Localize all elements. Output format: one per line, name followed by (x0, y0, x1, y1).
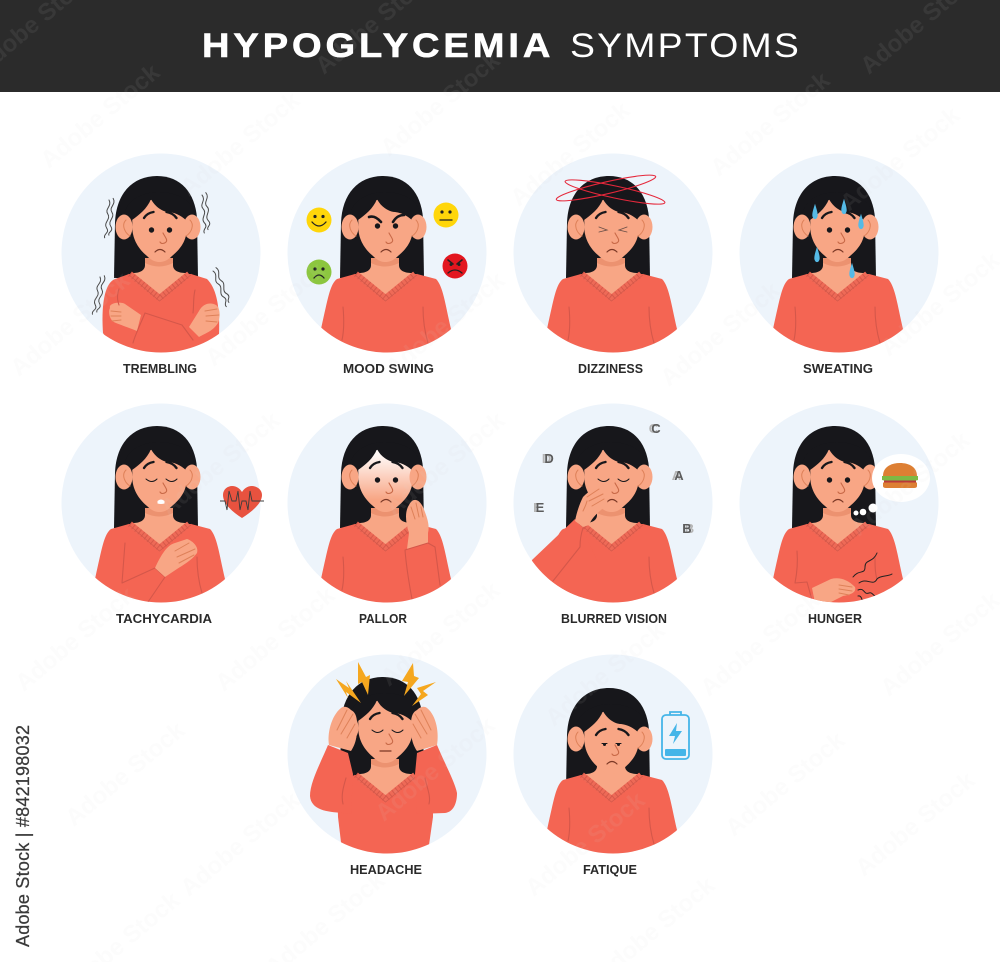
title: HYPOGLYCEMIA (202, 26, 550, 65)
figure: woman holding head (310, 677, 457, 859)
icon: blurred letters: B (685, 521, 694, 536)
label: fatique: FATIQUE (583, 862, 637, 877)
circle background (288, 154, 486, 352)
watermark: Adobe Stock (370, 711, 501, 827)
panel: tachycardia (62, 404, 264, 613)
icon: low battery (662, 712, 689, 759)
panel: mood swing (288, 154, 486, 363)
icon: blurred letters (533, 421, 694, 536)
watermark: Adobe Stock (705, 66, 836, 182)
watermark: Adobe Stock (375, 46, 506, 162)
icon: blurred letters: A (672, 468, 682, 483)
circle background (288, 654, 486, 854)
circle background (514, 404, 712, 602)
watermark: Adobe Stock (835, 101, 966, 217)
icon: angry face (442, 254, 468, 278)
icon: happy face (306, 208, 332, 232)
watermark: Adobe Stock (155, 406, 286, 522)
circle background (288, 404, 486, 602)
watermark: Adobe Stock (540, 616, 671, 732)
icon: blurred letters: C (649, 421, 659, 436)
label: hunger: HUNGER (808, 611, 863, 626)
panel: dizziness (514, 154, 712, 363)
figure: tired woman (547, 688, 677, 864)
watermark: Adobe Stock (375, 576, 506, 692)
icon: heart with ECG (220, 486, 264, 518)
label: mood swing: MOOD SWING (343, 361, 434, 376)
circle background (514, 654, 712, 854)
icon: blurred letters: E (533, 500, 542, 515)
figure: woman rubbing eye (532, 426, 677, 602)
figure: woman hand on chest (95, 426, 225, 613)
label: pallor: PALLOR (359, 611, 408, 626)
watermark: Adobe Stock (10, 581, 141, 697)
watermark: Adobe Stock (845, 426, 976, 542)
circle background (514, 154, 712, 352)
icon: lightning bolts (336, 662, 436, 706)
watermark: Adobe Stock (850, 766, 981, 882)
icon: blurred letters: D (544, 451, 554, 466)
icon: blurred letters: C (651, 421, 661, 436)
watermark: Adobe Stock (520, 786, 651, 902)
circle background (740, 154, 938, 352)
icon: shake lines (92, 193, 232, 315)
icon: neutral face (434, 202, 458, 228)
panel: headache (288, 654, 486, 859)
icon: thought bubble with burger (854, 454, 930, 516)
panel: sweating (740, 154, 938, 363)
watermark: Adobe Stock (5, 266, 136, 382)
icon: blurred letters: B (682, 521, 692, 536)
title: SYMPTOMS (570, 27, 799, 65)
icon: blurred letters: E (536, 500, 545, 515)
watermark: Adobe Stock (505, 96, 636, 212)
watermark: Adobe Stock (175, 86, 306, 202)
icon: blurred letters: A (674, 468, 684, 483)
label: trembling: TREMBLING (123, 361, 197, 376)
label: blurred vision: BLURRED VISION (561, 611, 667, 626)
circle background (62, 154, 260, 352)
figure: pale woman (321, 426, 451, 613)
icon: dizzy rings (555, 171, 666, 208)
watermark: Adobe Stock (35, 58, 166, 174)
title (202, 26, 799, 65)
panel: trembling (62, 154, 260, 363)
panel: pallor (288, 404, 486, 613)
figure: trembling woman (102, 176, 220, 363)
panel: blurred vision (514, 404, 712, 613)
watermark: Adobe Stock (175, 786, 306, 902)
circle background (740, 404, 938, 602)
panel: fatigue (514, 654, 712, 864)
watermark: Adobe Stock (655, 276, 786, 392)
icon: blurred letters: D (542, 451, 551, 466)
watermark: Adobe Stock (380, 406, 511, 522)
icon: sad face (306, 260, 332, 284)
icon: sweat drops (812, 199, 864, 278)
watermark: Adobe Stock (200, 256, 331, 372)
label: dizziness: DIZZINESS (578, 361, 643, 376)
watermark: Adobe Stock (720, 726, 851, 842)
figure: hungry woman (773, 426, 903, 613)
figure: dizzy woman (547, 176, 677, 363)
circle background (62, 404, 260, 602)
label: headache: HEADACHE (350, 862, 422, 877)
watermark: Adobe Stock (60, 716, 191, 832)
figure: sweating woman (773, 176, 903, 363)
watermark: Adobe Stock (380, 266, 511, 382)
watermark: Adobe Stock (210, 581, 341, 697)
header bar (0, 0, 1000, 92)
watermark: Adobe Stock (695, 586, 826, 702)
figure: angry woman (321, 176, 451, 363)
stock id stamp: Adobe Stock | #842198032 (13, 725, 33, 947)
panel: hunger (740, 404, 938, 613)
label: sweating: SWEATING (803, 361, 873, 376)
label: tachycardia: TACHYCARDIA (116, 611, 213, 626)
